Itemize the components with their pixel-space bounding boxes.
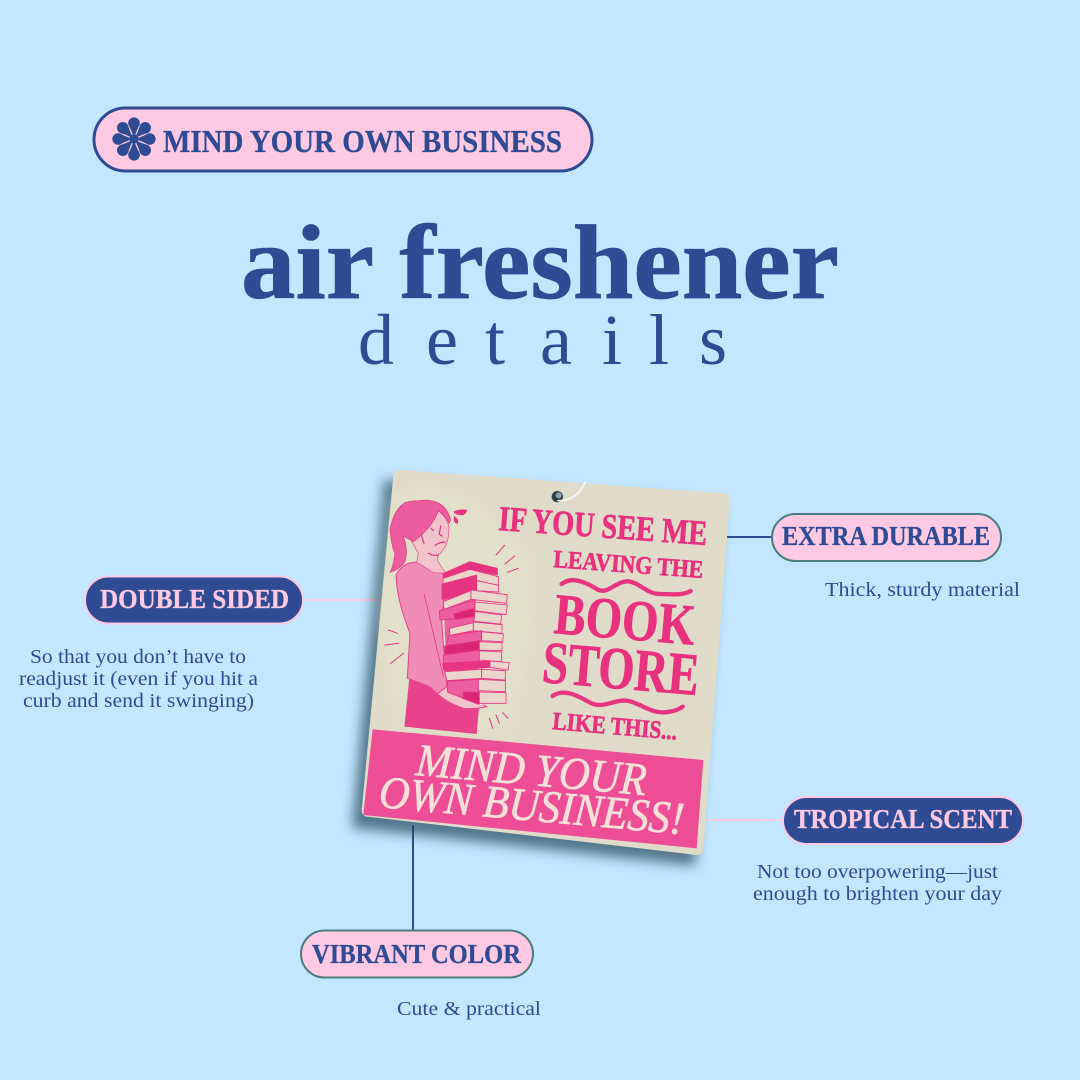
description: double sided: [19, 647, 258, 712]
sweater: [396, 562, 447, 694]
label: tropical scent: TROPICAL SCENT: [794, 804, 1012, 834]
label: vibrant color: VIBRANT COLOR: [312, 939, 521, 969]
card text: if you see me: IF YOU SEE ME: [497, 499, 709, 553]
label: tropical scent: [783, 797, 1023, 844]
pants: [404, 678, 479, 734]
description: extra durable: Thick, sturdy material: [825, 580, 1021, 601]
wavy line top: [562, 580, 691, 594]
card text: leaving the: LEAVING THE: [553, 546, 704, 584]
connector: extra durable: [726, 536, 773, 538]
air freshener card: [352, 467, 733, 866]
book stack: [439, 562, 509, 705]
description: vibrant color: Cute & practical: [397, 999, 542, 1020]
label: vibrant color: [301, 930, 533, 978]
card text: like this: LIKE THIS...: [551, 708, 678, 746]
card text: book: BOOK: [552, 581, 698, 658]
subtitle: details: [358, 300, 727, 380]
pink banner: [363, 729, 703, 848]
description: double sided: So that you don’t have to: [30, 647, 246, 668]
arm line: [424, 593, 443, 677]
card text: store: STORE: [540, 629, 702, 708]
pale halo: [380, 490, 530, 727]
grain texture: [452, 592, 475, 696]
label: double sided: [85, 576, 303, 624]
description: double sided: curb and send it swinging): [23, 691, 254, 712]
card text: own business: OWN BUSINESS!: [377, 766, 686, 844]
connector: vibrant color: [412, 825, 414, 931]
label: extra durable: [772, 514, 1001, 561]
label: extra durable: EXTRA DURABLE: [782, 521, 990, 551]
brand name: MIND YOUR OWN BUSINESS: [163, 123, 562, 159]
face lines: [421, 526, 445, 555]
title: air freshener: [241, 204, 839, 321]
connector: double sided: [303, 599, 385, 601]
hole and string: [552, 482, 585, 502]
hair: [390, 500, 451, 572]
description: tropical scent: enough to brighten your day: [753, 884, 1002, 905]
hand: [437, 687, 487, 709]
description: double sided: readjust it (even if you hit a: [19, 669, 258, 690]
sweat drops: [453, 509, 467, 524]
brand pill: [94, 108, 592, 171]
face and neck: [412, 511, 449, 573]
description: tropical scent: Not too overpowering—just: [757, 862, 999, 883]
illustration: woman with books: [385, 500, 518, 734]
connector: tropical scent: [705, 819, 784, 821]
description: tropical scent: [753, 862, 1002, 905]
icon: flower: [112, 117, 156, 161]
label: double sided: DOUBLE SIDED: [100, 584, 289, 614]
wavy line bottom: [553, 693, 683, 712]
card base: [363, 476, 724, 849]
card text: mind your: MIND YOUR: [413, 734, 649, 805]
card shadow: [352, 480, 722, 866]
motion lines: [385, 545, 518, 728]
